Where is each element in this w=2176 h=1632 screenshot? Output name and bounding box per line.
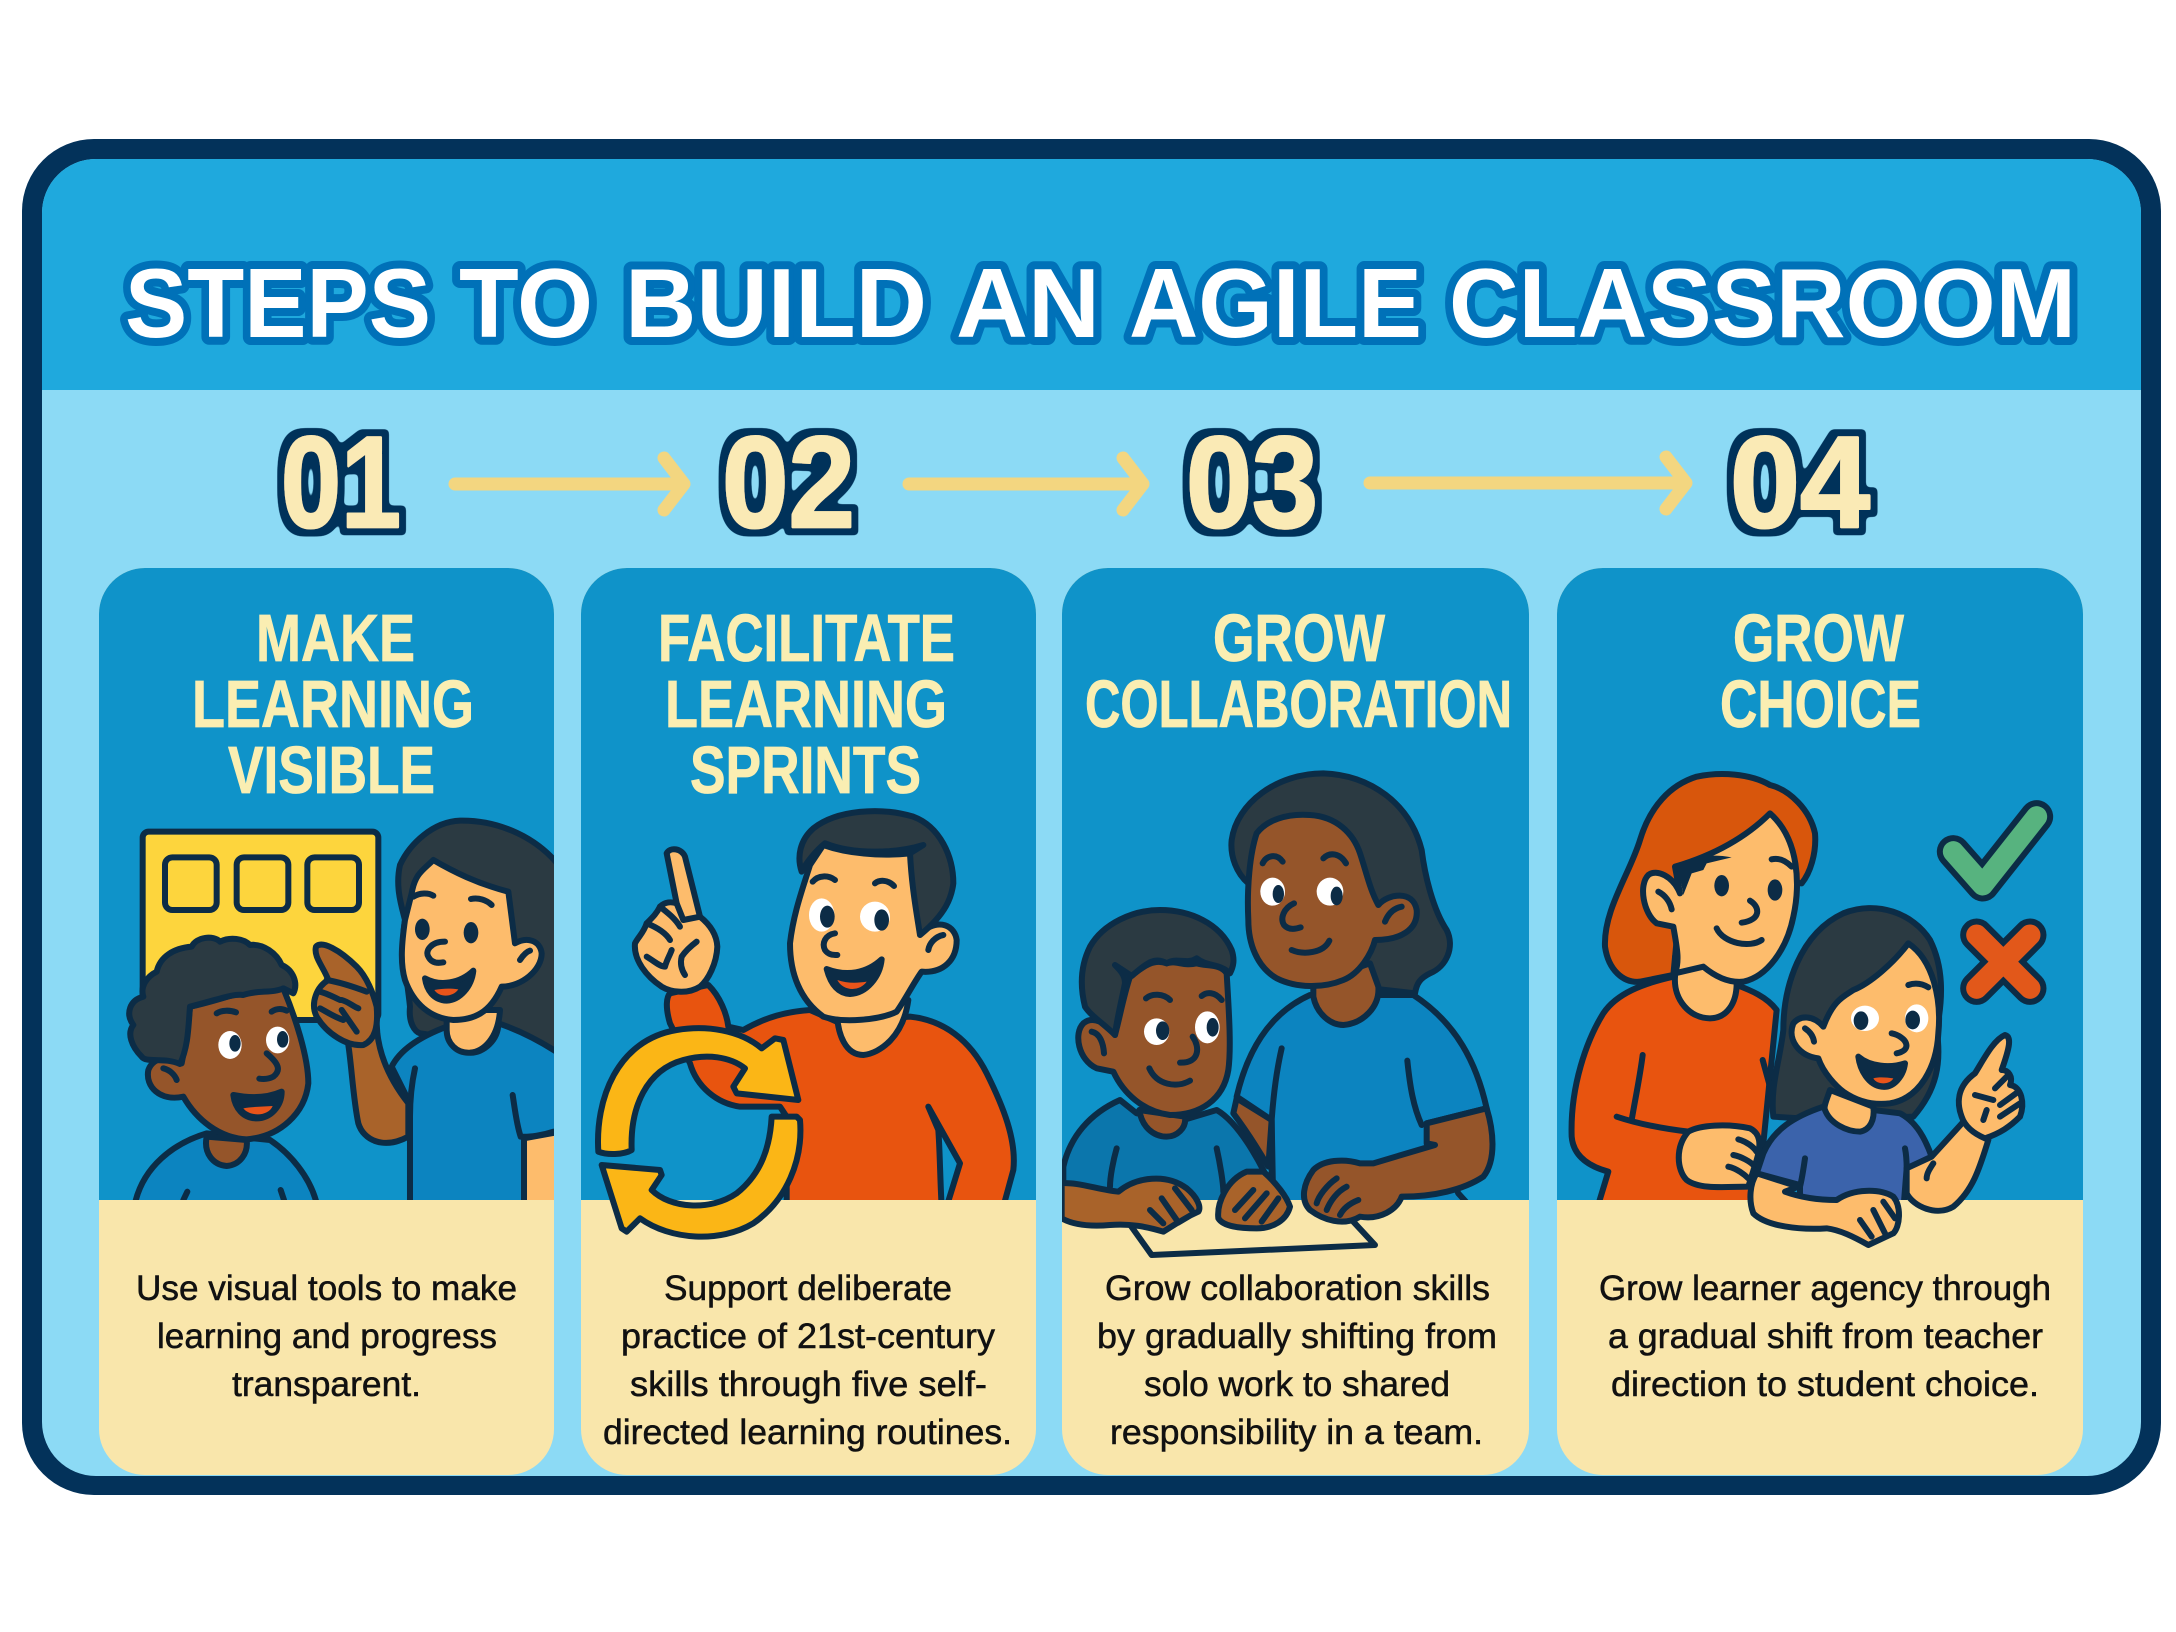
card background bbox=[1557, 568, 2083, 1475]
card heading bbox=[1720, 601, 1921, 742]
title: BUILD bbox=[625, 248, 927, 358]
card description: Grow collaboration skills bbox=[1105, 1269, 1490, 1308]
card description: a gradual shift from teacher bbox=[1608, 1317, 2043, 1356]
arrow 02 to 03 bbox=[909, 458, 1143, 510]
illustration: teacher and boy at board bbox=[129, 821, 560, 1207]
icon: gold cycle arrows bbox=[598, 1028, 800, 1237]
step number 01: 01 bbox=[281, 409, 401, 555]
card description: Support deliberate bbox=[664, 1269, 952, 1308]
card description: solo work to shared bbox=[1144, 1365, 1450, 1404]
boy bbox=[1063, 910, 1280, 1210]
arrow 03 to 04 bbox=[1370, 457, 1686, 509]
card description: Grow learner agency through bbox=[1599, 1269, 2051, 1308]
card heading bbox=[658, 601, 955, 808]
panel: facilitate learning sprints bbox=[581, 568, 1036, 1475]
card description bbox=[1097, 1269, 1497, 1452]
card heading: GROW bbox=[1213, 601, 1386, 676]
card description: Use visual tools to make bbox=[136, 1269, 517, 1308]
card background bbox=[99, 568, 554, 1475]
card description: skills through five self- bbox=[630, 1365, 987, 1404]
orange sweater bbox=[667, 985, 1014, 1207]
yellow board bbox=[143, 832, 378, 1020]
card heading bbox=[1085, 601, 1512, 742]
card heading: VISIBLE bbox=[228, 733, 435, 808]
step number 04: 04 bbox=[1730, 409, 1870, 555]
card heading: FACILITATE bbox=[658, 601, 955, 676]
card description: directed learning routines. bbox=[603, 1413, 1012, 1452]
title: TO bbox=[459, 248, 593, 358]
card heading: GROW bbox=[1733, 601, 1905, 676]
card description bbox=[136, 1269, 517, 1404]
boy's hands bbox=[1062, 1172, 1290, 1232]
title: AGILE bbox=[1129, 248, 1422, 358]
card heading: COLLABORATION bbox=[1085, 667, 1512, 742]
panel: grow choice bbox=[1557, 568, 2083, 1475]
card description: practice of 21st-century bbox=[621, 1317, 996, 1356]
title: AN bbox=[956, 248, 1100, 358]
card heading: CHOICE bbox=[1720, 667, 1921, 742]
card heading: LEARNING bbox=[192, 667, 474, 742]
card heading: MAKE bbox=[256, 601, 415, 676]
girl bbox=[1757, 908, 1941, 1210]
raised hand bbox=[635, 849, 717, 992]
icon: green check mark bbox=[1953, 817, 2037, 885]
woman and girl figures bbox=[1572, 774, 1941, 1210]
arm gap bbox=[928, 1107, 960, 1207]
card heading: LEARNING bbox=[665, 667, 947, 742]
boy's pointing arm bbox=[314, 945, 408, 1143]
girl's arms and raised hand bbox=[1750, 1035, 2022, 1245]
woman bbox=[1231, 773, 1487, 1210]
illustration: woman and boy with paper bbox=[1062, 773, 1492, 1255]
card heading: SPRINTS bbox=[690, 733, 921, 808]
step number 03: 03 bbox=[1186, 409, 1318, 555]
teacher bbox=[392, 821, 560, 1207]
woman's arm and hand bbox=[1304, 1108, 1492, 1222]
arrow 01 to 02 bbox=[455, 458, 684, 510]
step number 02: 02 bbox=[722, 409, 855, 555]
paper bbox=[1127, 1220, 1375, 1255]
illustration: man pointing up bbox=[635, 811, 1014, 1207]
card description: responsibility in a team. bbox=[1110, 1413, 1483, 1452]
card description bbox=[1599, 1269, 2051, 1404]
card background bbox=[581, 568, 1036, 1475]
card heading bbox=[192, 601, 474, 808]
card description: by gradually shifting from bbox=[1097, 1317, 1497, 1356]
card description: learning and progress bbox=[157, 1317, 497, 1356]
woman and boy figures bbox=[1063, 773, 1487, 1210]
woman's hand on girl's shoulder bbox=[1679, 1125, 1759, 1187]
illustration: teacher and girl choosing bbox=[1572, 774, 2037, 1245]
title: CLASSROOM bbox=[1449, 248, 2076, 358]
title: STEPS bbox=[125, 248, 431, 358]
icon: orange cross bbox=[1977, 935, 2030, 988]
card background bbox=[1062, 568, 1529, 1475]
card description: transparent. bbox=[232, 1365, 421, 1404]
boy bbox=[129, 938, 317, 1203]
woman with red hair bbox=[1572, 774, 1815, 1210]
card description bbox=[603, 1269, 1012, 1452]
card description: direction to student choice. bbox=[1611, 1365, 2039, 1404]
panel: make learning visible bbox=[99, 568, 560, 1475]
man's head bbox=[790, 811, 957, 1055]
panel: grow collaboration bbox=[1062, 568, 1529, 1475]
